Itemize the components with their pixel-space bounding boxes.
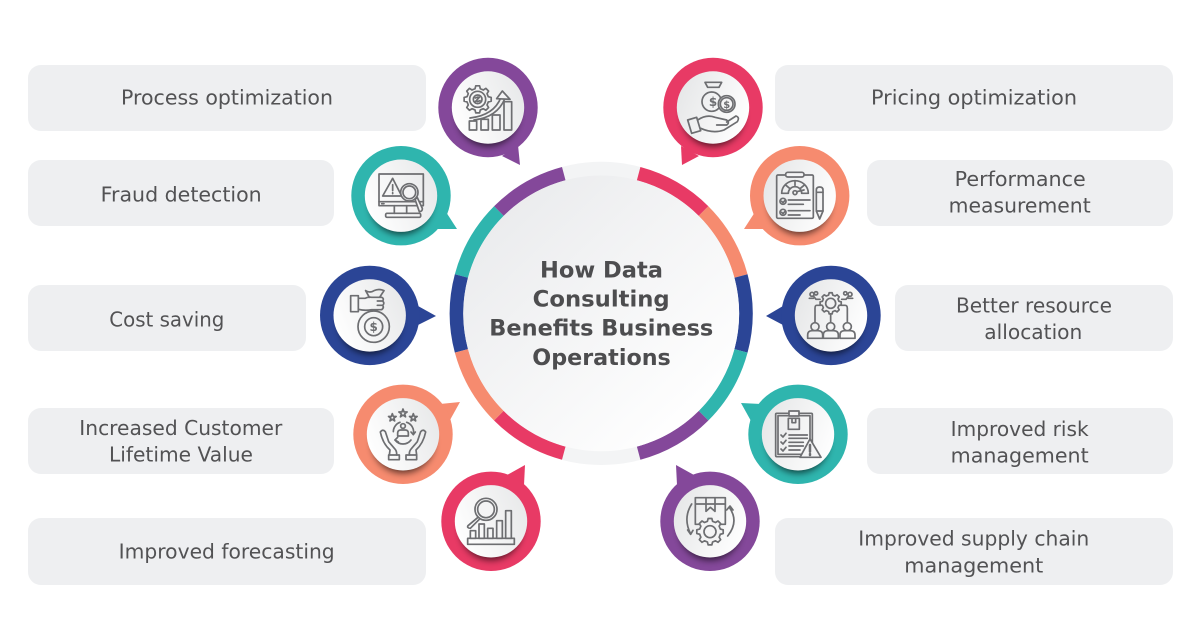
label box: Improved risk management: management	[951, 444, 1089, 468]
label box: Increased Customer Lifetime Value: Lifetime Value	[109, 443, 253, 467]
label box: Improved supply chain management: management	[904, 553, 1043, 577]
bubble: improved risk management	[741, 385, 848, 484]
label box: Improved supply chain management	[775, 518, 1173, 585]
icon: box with gear and cycle arrows	[687, 498, 734, 545]
bubble: fraud detection	[351, 146, 457, 245]
icon: hand with money bag and coins: $	[709, 95, 717, 109]
label box: Better resource allocation	[895, 285, 1173, 351]
bubble: process optimization	[438, 58, 538, 165]
label box: Improved forecasting: Improved forecasting	[119, 539, 335, 563]
label box: Pricing optimization	[775, 65, 1173, 131]
label box: Increased Customer Lifetime Value	[28, 408, 334, 474]
icon: hands with stars and customer	[380, 409, 426, 460]
hub disc	[463, 176, 739, 451]
label box: Improved risk management: Improved risk	[951, 417, 1089, 441]
bubble: performance measurement	[744, 146, 849, 245]
bubble: cost saving	[320, 266, 436, 365]
label box: Improved forecasting	[28, 518, 426, 585]
label box: Improved risk management	[867, 408, 1173, 474]
bubble: improved forecasting	[441, 465, 541, 571]
icon: checklist clipboard with warning	[776, 411, 821, 457]
bubble: pricing optimization	[663, 58, 763, 165]
icon: gear and rising bars	[464, 86, 512, 130]
title: How Data	[540, 259, 663, 284]
bubble: increased customer lifetime value	[353, 385, 460, 484]
central hub with segmented ring and title	[450, 162, 753, 465]
label box: Increased Customer Lifetime Value: Increased Customer	[79, 416, 283, 440]
label box: Process optimization: Process optimization	[121, 86, 333, 110]
label box: Fraud detection	[28, 160, 334, 226]
icon: monitor with warning and magnifier	[379, 174, 423, 217]
icon: hand holding money bag: $	[369, 320, 378, 334]
title: Benefits Business	[489, 317, 713, 342]
label box: Fraud detection: Fraud detection	[101, 183, 262, 207]
icon: hand with money bag and coins	[688, 82, 738, 133]
bubble: improved supply chain management	[660, 465, 760, 571]
icon: clipboard gauge and pencil	[777, 172, 823, 219]
icon: gear linked to three people	[808, 292, 855, 338]
label box: Cost saving: Cost saving	[109, 308, 224, 332]
label box: Cost saving	[28, 285, 306, 351]
title: Consulting	[533, 288, 670, 313]
title	[489, 259, 713, 371]
label box: Improved supply chain management: Improved supply chain	[858, 527, 1089, 551]
label box: Performance measurement: measurement	[949, 194, 1091, 218]
label box: Better resource allocation: Better resource	[956, 293, 1112, 317]
bubble: better resource allocation	[766, 266, 881, 365]
label box: Performance measurement	[867, 160, 1173, 226]
icon: magnifier over bar chart	[468, 498, 514, 544]
title: Operations	[532, 346, 671, 371]
ring segments	[456, 174, 746, 453]
label box: Pricing optimization: Pricing optimization	[871, 85, 1077, 109]
label box: Performance measurement: Performance	[955, 167, 1086, 191]
label box: Process optimization	[28, 65, 426, 131]
label box: Better resource allocation: allocation	[984, 320, 1082, 344]
icon: hand with money bag and coins: $	[723, 100, 730, 111]
